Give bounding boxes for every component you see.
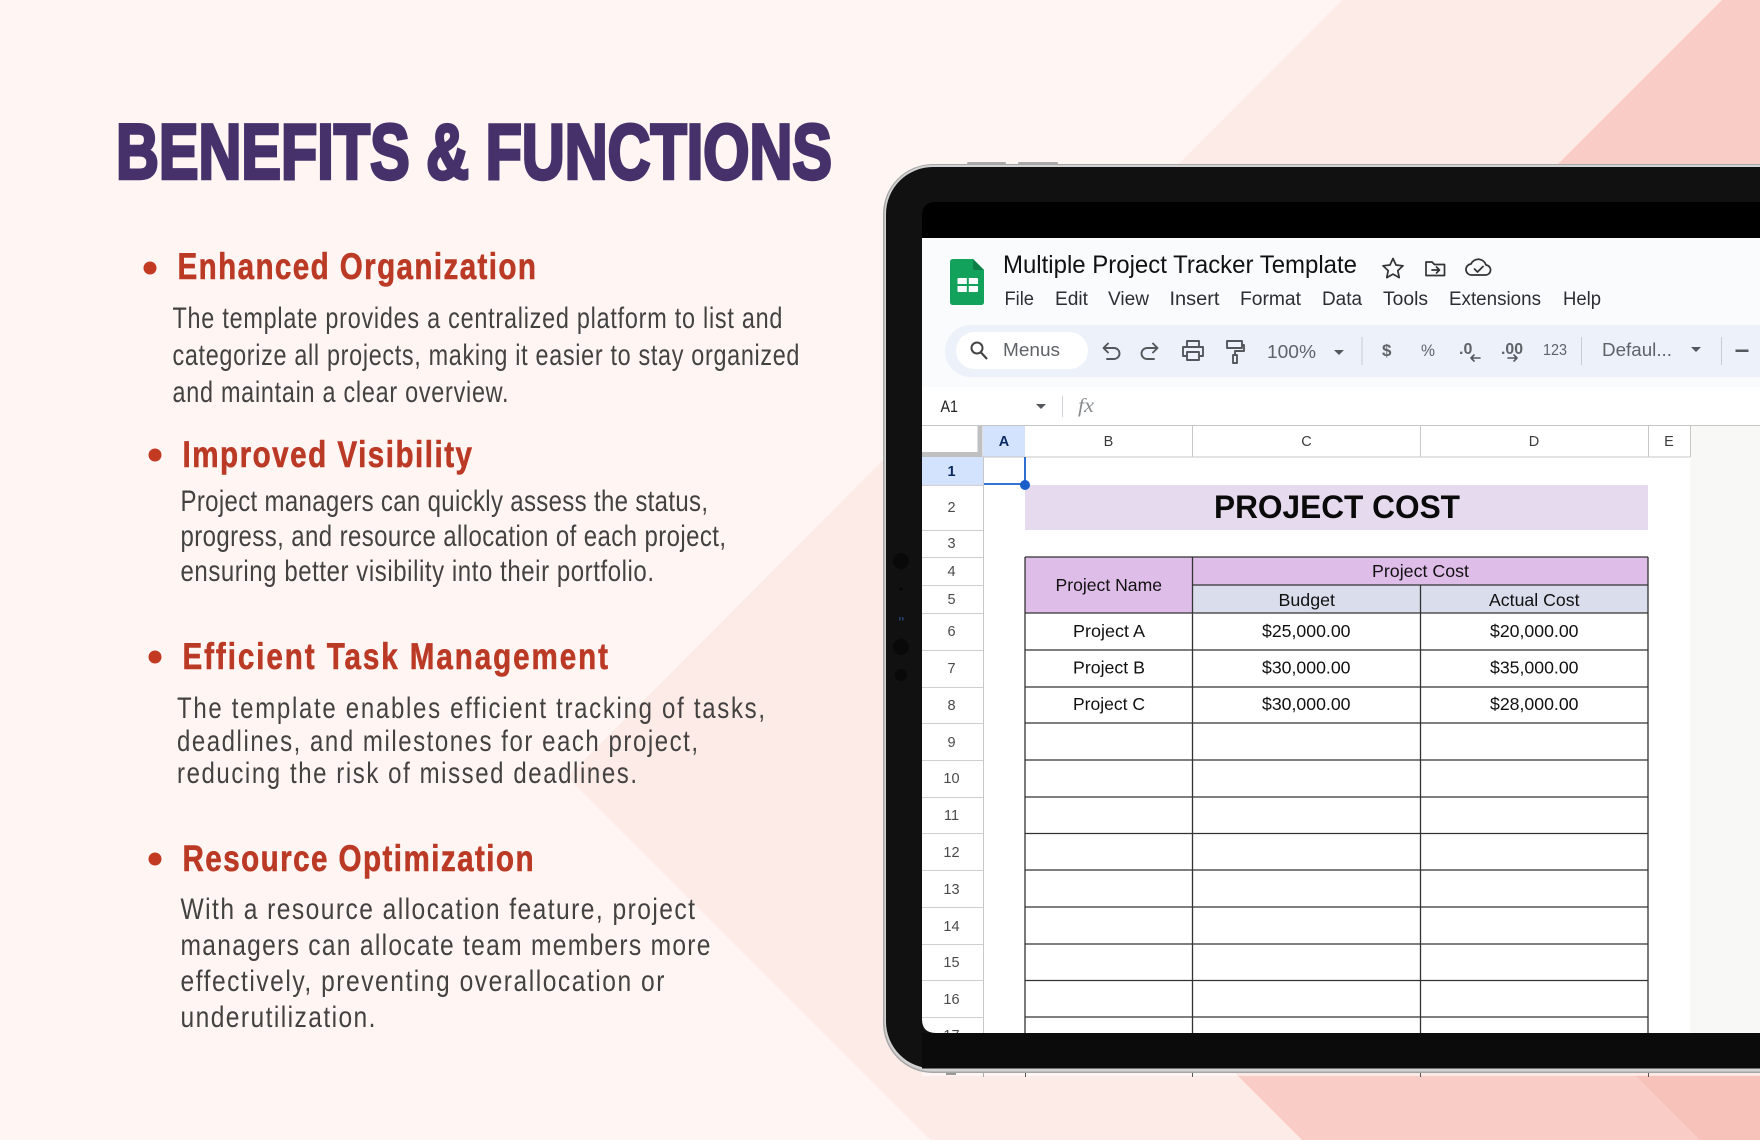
toolbar bbox=[945, 325, 1760, 377]
row: project A: $25,000.00 bbox=[1262, 621, 1351, 641]
project cost table bbox=[1025, 557, 1648, 1033]
spreadsheet screen bbox=[922, 202, 1760, 1044]
benefit: resource optimization bbox=[148, 839, 710, 1034]
heading: Enhanced Organization bbox=[178, 247, 536, 288]
description: With a resource allocation feature, project bbox=[180, 892, 695, 926]
font size minus bbox=[1736, 350, 1748, 352]
camera sensors bbox=[893, 553, 909, 681]
column headers: B bbox=[1104, 434, 1113, 450]
search menus pill bbox=[956, 332, 1088, 369]
table grid bbox=[1025, 557, 1648, 1033]
font selector bbox=[1604, 342, 1701, 356]
document title: Multiple Project Tracker Template bbox=[1003, 251, 1357, 279]
row: project A: Project A bbox=[1073, 621, 1145, 641]
menu bar: Tools bbox=[1383, 289, 1428, 310]
row headers: 11 bbox=[944, 808, 959, 824]
formula bar: fx bbox=[1078, 395, 1094, 417]
description: The template provides a centralized platform to list and bbox=[172, 301, 782, 335]
table header fills bbox=[1025, 557, 1648, 613]
icon: star bbox=[1383, 258, 1403, 278]
number format tools: $ bbox=[1382, 341, 1392, 360]
menu bar: Data bbox=[1322, 289, 1362, 310]
description bbox=[177, 690, 765, 790]
heading: Resource Optimization bbox=[182, 839, 534, 880]
description: deadlines, and milestones for each project, bbox=[177, 723, 698, 758]
row headers: 13 bbox=[943, 882, 960, 898]
font selector: Defaul... bbox=[1602, 340, 1672, 360]
row: project C: $28,000.00 bbox=[1490, 694, 1579, 714]
tablet top buttons bbox=[967, 162, 1058, 165]
description: Project managers can quickly assess the status, bbox=[180, 483, 708, 518]
formula bar: A1 bbox=[940, 397, 958, 416]
number format tools: .0 bbox=[1459, 341, 1472, 358]
row headers: 16 bbox=[943, 992, 960, 1008]
table header labels: Project Cost bbox=[1372, 561, 1469, 581]
icon: undo bbox=[1104, 344, 1120, 359]
banner: project cost bbox=[1025, 485, 1648, 530]
menu bar: Edit bbox=[1055, 289, 1089, 310]
column headers: C bbox=[1301, 434, 1312, 450]
description: effectively, preventing overallocation or bbox=[180, 964, 664, 998]
menu bar: Help bbox=[1563, 289, 1601, 310]
row headers: 6 bbox=[947, 624, 956, 640]
row headers: 1 bbox=[947, 464, 956, 480]
number format tools bbox=[1382, 341, 1567, 361]
column headers: E bbox=[1664, 434, 1674, 450]
description bbox=[180, 892, 710, 1034]
selected cell A1 bbox=[984, 457, 1030, 490]
row headers: 3 bbox=[947, 536, 956, 552]
icon: redo bbox=[1142, 344, 1158, 359]
row headers: 15 bbox=[943, 955, 960, 971]
description bbox=[172, 301, 799, 409]
menu bar: Extensions bbox=[1449, 289, 1541, 310]
row headers: 2 bbox=[947, 500, 956, 516]
description: progress, and resource allocation of each project, bbox=[180, 518, 726, 553]
bullet bbox=[148, 650, 162, 664]
benefit: enhanced organization bbox=[144, 247, 799, 409]
row headers: 4 bbox=[947, 564, 956, 580]
column headers: A bbox=[999, 434, 1010, 450]
description: reducing the risk of missed deadlines. bbox=[177, 755, 637, 790]
row headers bbox=[922, 457, 984, 1044]
heading: Improved Visibility bbox=[182, 435, 472, 476]
tablet device bbox=[883, 162, 1760, 1077]
benefit: efficient task management bbox=[148, 637, 765, 790]
menu bar: File bbox=[1004, 289, 1034, 310]
row headers: 9 bbox=[947, 735, 956, 751]
menu bar bbox=[1006, 291, 1600, 309]
table header labels bbox=[1056, 561, 1580, 610]
row: project A: $20,000.00 bbox=[1490, 621, 1579, 641]
icon: move to folder bbox=[1426, 262, 1444, 276]
number format tools: 123 bbox=[1543, 342, 1567, 359]
row: project C bbox=[1074, 696, 1578, 714]
description: The template enables efficient tracking of tasks, bbox=[177, 690, 765, 725]
icon: paint format bbox=[1227, 341, 1244, 363]
table header labels: Project Name bbox=[1056, 575, 1162, 595]
row headers: 17 bbox=[943, 1028, 960, 1044]
bullet bbox=[148, 448, 162, 462]
zoom caret bbox=[1334, 350, 1344, 355]
table header labels: Actual Cost bbox=[1489, 590, 1580, 610]
sheets app icon bbox=[950, 259, 984, 305]
row headers: 5 bbox=[947, 592, 956, 608]
row headers: 7 bbox=[947, 661, 956, 677]
table header labels: Budget bbox=[1278, 590, 1335, 610]
icon: print bbox=[1183, 341, 1203, 360]
ghost of sheet below tablet bbox=[922, 1072, 1760, 1077]
row: project C: $30,000.00 bbox=[1262, 694, 1351, 714]
formula bar bbox=[940, 395, 1094, 417]
description: ensuring better visibility into their portfolio. bbox=[180, 553, 654, 588]
menu bar: Insert bbox=[1170, 289, 1220, 310]
row: project C: Project C bbox=[1073, 694, 1145, 714]
icon: cloud saved bbox=[1466, 259, 1491, 275]
menu bar: View bbox=[1108, 289, 1149, 310]
bullet bbox=[144, 262, 156, 274]
number format tools: % bbox=[1421, 341, 1435, 360]
heading: Efficient Task Management bbox=[182, 637, 608, 678]
description: underutilization. bbox=[180, 1000, 375, 1034]
zoom level: 100% bbox=[1267, 342, 1316, 362]
description: categorize all projects, making it easier to stay organized bbox=[172, 338, 799, 372]
row headers: 10 bbox=[943, 771, 960, 787]
row headers: 12 bbox=[943, 845, 960, 861]
row: project B: Project B bbox=[1073, 658, 1145, 678]
column headers bbox=[922, 425, 1760, 458]
banner: project cost: PROJECT COST bbox=[1214, 489, 1460, 525]
bullet bbox=[148, 852, 162, 866]
row headers: 14 bbox=[943, 919, 960, 935]
row: project B bbox=[1074, 660, 1578, 677]
description: managers can allocate team members more bbox=[180, 928, 710, 962]
row: project A bbox=[1074, 624, 1578, 640]
description bbox=[180, 483, 726, 588]
benefit: improved visibility bbox=[148, 435, 726, 588]
column headers: D bbox=[1529, 434, 1539, 450]
row headers: 8 bbox=[947, 698, 956, 714]
search menus pill: Menus bbox=[1003, 340, 1060, 360]
row: project B: $30,000.00 bbox=[1262, 658, 1351, 678]
tablet bezel bbox=[883, 164, 1760, 1073]
title: BENEFITS & FUNCTIONS bbox=[116, 108, 832, 196]
row: project B: $35,000.00 bbox=[1490, 658, 1579, 678]
menu bar: Format bbox=[1240, 289, 1302, 310]
number format tools: .00 bbox=[1501, 341, 1523, 358]
description: and maintain a clear overview. bbox=[172, 375, 509, 409]
